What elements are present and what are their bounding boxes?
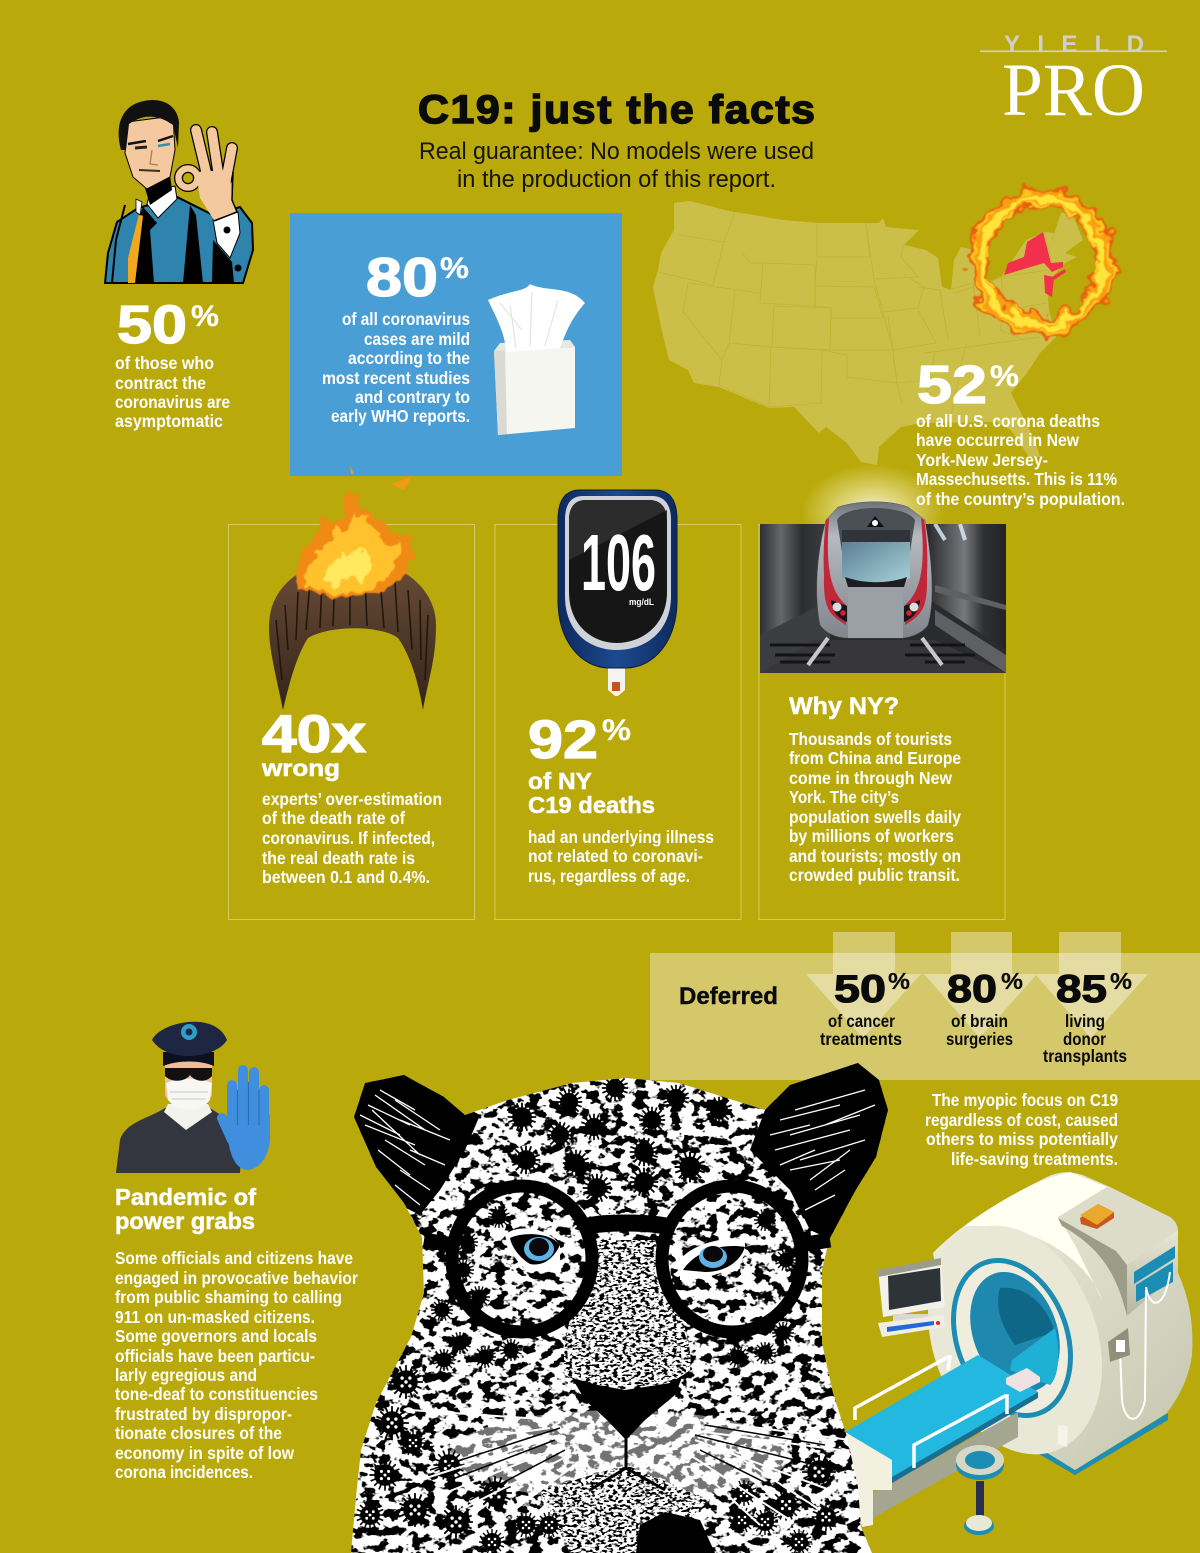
text: why NY explanation: by millions of workers xyxy=(789,826,954,846)
stat: 80% brain: % xyxy=(1001,968,1023,994)
US map xyxy=(653,201,1083,465)
text: power grabs: tone-deaf to constituencies xyxy=(115,1384,318,1404)
stat: 52 percent deaths: York-New Jersey- xyxy=(916,450,1048,470)
nose xyxy=(572,1375,683,1490)
heading: Pandemic of power grabs xyxy=(115,1184,256,1234)
stat: 50 percent asymptomatic: coronavirus are xyxy=(115,392,230,412)
text: underlying illness: rus, regardless of age. xyxy=(528,866,690,886)
illustration: man making OK sign xyxy=(105,100,253,283)
stat: 92%: 92 xyxy=(528,710,598,770)
text: mild cases: most recent studies xyxy=(322,368,470,388)
title: C19: just the facts xyxy=(418,87,815,132)
text: myopic focus: others to miss potentially xyxy=(926,1129,1118,1149)
text: over-estimation: between 0.1 and 0.4%. xyxy=(262,867,430,887)
stat: 85% transplants xyxy=(1043,968,1132,1066)
stat: 40x wrong: 40x xyxy=(262,705,367,764)
stat: 92% xyxy=(528,710,655,818)
heading: Pandemic of power grabs: Pandemic of xyxy=(115,1184,256,1210)
subtitle: in the production of this report. xyxy=(457,166,776,193)
stat: 50 percent asymptomatic: contract the xyxy=(115,373,206,393)
stat: 52 percent deaths: Massechusetts. This is 11% xyxy=(916,469,1117,489)
text: over-estimation xyxy=(262,789,442,887)
text: why NY explanation: crowded public transit. xyxy=(789,865,960,885)
text: mild cases: according to the xyxy=(348,348,470,368)
New York highlighted region xyxy=(1004,232,1066,297)
stat: 52 percent deaths: of all U.S. corona deaths xyxy=(916,411,1100,431)
stat: 92%: % xyxy=(602,714,631,747)
illustration: leopard with glasses xyxy=(340,1060,900,1553)
text: myopic focus: life-saving treatments. xyxy=(951,1149,1118,1169)
text: power grabs: frustrated by dispropor- xyxy=(115,1404,292,1424)
text: mild cases: of all coronavirus xyxy=(342,309,470,329)
stat: 85% transplants: 85 xyxy=(1056,968,1107,1011)
text: mild cases: early WHO reports. xyxy=(331,406,470,426)
stat: 80% brain: surgeries xyxy=(946,1029,1013,1049)
text: myopic focus xyxy=(925,1090,1118,1169)
stat: 52 percent deaths xyxy=(916,355,1125,509)
panel: 92 percent NY deaths xyxy=(495,490,741,920)
icon: ring of fire xyxy=(973,193,1111,331)
text: power grabs: larly egregious and xyxy=(115,1365,257,1385)
text: why NY explanation: population swells daily xyxy=(789,807,961,827)
icon: burning hair xyxy=(269,466,436,710)
eyes xyxy=(505,1228,745,1280)
text: power grabs: officials have been particu- xyxy=(115,1346,315,1366)
arrows: down xyxy=(806,932,1148,1038)
stat: 85% transplants: transplants xyxy=(1043,1046,1127,1066)
text: power grabs: Some officials and citizens have xyxy=(115,1248,353,1268)
stat: 52 percent deaths: 52 xyxy=(917,355,987,415)
stat: 50 percent asymptomatic: 50 xyxy=(117,295,187,355)
text: myopic focus: regardless of cost, caused xyxy=(925,1110,1118,1130)
icon: glucose meter: mg/dL xyxy=(629,597,654,607)
text: why NY explanation: York. The city’s xyxy=(789,787,899,807)
stat: 50 percent asymptomatic: of those who xyxy=(115,353,214,373)
text: mild cases: cases are mild xyxy=(364,329,470,349)
logo: Yield Pro xyxy=(980,31,1167,132)
icon: glucose meter xyxy=(558,490,677,696)
icon: glucose meter: 106 xyxy=(581,518,656,607)
text: power grabs: 911 on un-masked citizens. xyxy=(115,1307,315,1327)
stat: 80%: 80 xyxy=(366,246,438,308)
stat: 85% transplants: living xyxy=(1065,1011,1105,1031)
text: myopic focus: The myopic focus on C19 xyxy=(932,1090,1118,1110)
photo: subway train xyxy=(760,464,1006,673)
panel: why NY xyxy=(759,464,1006,920)
panel: 40x wrong xyxy=(228,466,474,920)
stat: 52 percent deaths: % xyxy=(990,360,1019,393)
text: mild cases xyxy=(322,309,470,426)
stat: 40x wrong: wrong xyxy=(261,755,340,781)
text: over-estimation: the real death rate is xyxy=(262,848,415,868)
stat: 50 percent asymptomatic: asymptomatic xyxy=(115,411,223,431)
stat: 92%: of NY xyxy=(528,768,592,794)
stat: 85% transplants: % xyxy=(1110,968,1132,994)
text: power grabs: corona incidences. xyxy=(115,1462,253,1482)
stat: 50 percent asymptomatic xyxy=(115,295,230,431)
text: power grabs: from public shaming to calling xyxy=(115,1287,342,1307)
stat: 50 percent asymptomatic: % xyxy=(191,300,219,333)
text: why NY explanation xyxy=(789,729,961,885)
stat: 80% brain xyxy=(946,968,1023,1049)
text: underlying illness: had an underlying illness xyxy=(528,827,714,847)
text: why NY explanation: from China and Europe xyxy=(789,748,961,768)
icon: tissue box xyxy=(488,284,585,435)
text: over-estimation: coronavirus. If infected, xyxy=(262,828,435,848)
text: underlying illness xyxy=(528,827,714,886)
stat: 92%: C19 deaths xyxy=(528,792,655,818)
text: power grabs xyxy=(115,1248,358,1482)
stat: 50% cancer: treatments xyxy=(820,1029,902,1049)
stat: 80% brain: of brain xyxy=(951,1011,1008,1031)
text: why NY explanation: Thousands of tourists xyxy=(789,729,952,749)
stat: 50% cancer: of cancer xyxy=(828,1011,895,1031)
text: underlying illness: not related to coronavi- xyxy=(528,846,703,866)
stat: 40x wrong xyxy=(261,705,367,781)
stat: 52 percent deaths: have occurred in New xyxy=(916,430,1079,450)
stat: 52 percent deaths: of the country’s population. xyxy=(916,489,1125,509)
stat: 50% cancer xyxy=(820,968,910,1049)
text: power grabs: engaged in provocative behavior xyxy=(115,1268,358,1288)
stat: 80%: % xyxy=(440,252,469,285)
text: power grabs: economy in spite of low xyxy=(115,1443,294,1463)
text: over-estimation: experts’ over-estimation xyxy=(262,789,442,809)
stat: 50% cancer: % xyxy=(888,968,910,994)
text: mild cases: and contrary to xyxy=(355,387,470,407)
heading: Why NY?: Why NY? xyxy=(789,693,899,720)
stat: 50% cancer: 50 xyxy=(834,968,886,1011)
glasses xyxy=(424,1186,830,1332)
label: Deferred: Deferred xyxy=(679,983,778,1010)
illustration: MRI machine xyxy=(845,1172,1192,1535)
subtitle xyxy=(419,138,814,193)
text: over-estimation: of the death rate of xyxy=(262,808,405,828)
stat: 80% xyxy=(366,246,469,308)
logo: Yield Pro: PRO xyxy=(1002,49,1145,132)
panel: deferred procedures xyxy=(650,932,1200,1080)
panel: 80 percent mild cases xyxy=(290,213,622,476)
text: power grabs: tionate closures of the xyxy=(115,1423,282,1443)
text: why NY explanation: and tourists; mostly on xyxy=(789,846,961,866)
text: why NY explanation: come in through New xyxy=(789,768,952,788)
stat: 80% brain: 80 xyxy=(947,968,997,1011)
heading: Pandemic of power grabs: power grabs xyxy=(115,1208,255,1234)
illustration: police officer with mask xyxy=(116,1022,270,1173)
text: power grabs: Some governors and locals xyxy=(115,1326,317,1346)
logo: Yield Pro: YIELD xyxy=(1004,31,1144,58)
subtitle: Real guarantee: No models were used xyxy=(419,138,814,165)
stat: 85% transplants: donor xyxy=(1063,1029,1106,1049)
